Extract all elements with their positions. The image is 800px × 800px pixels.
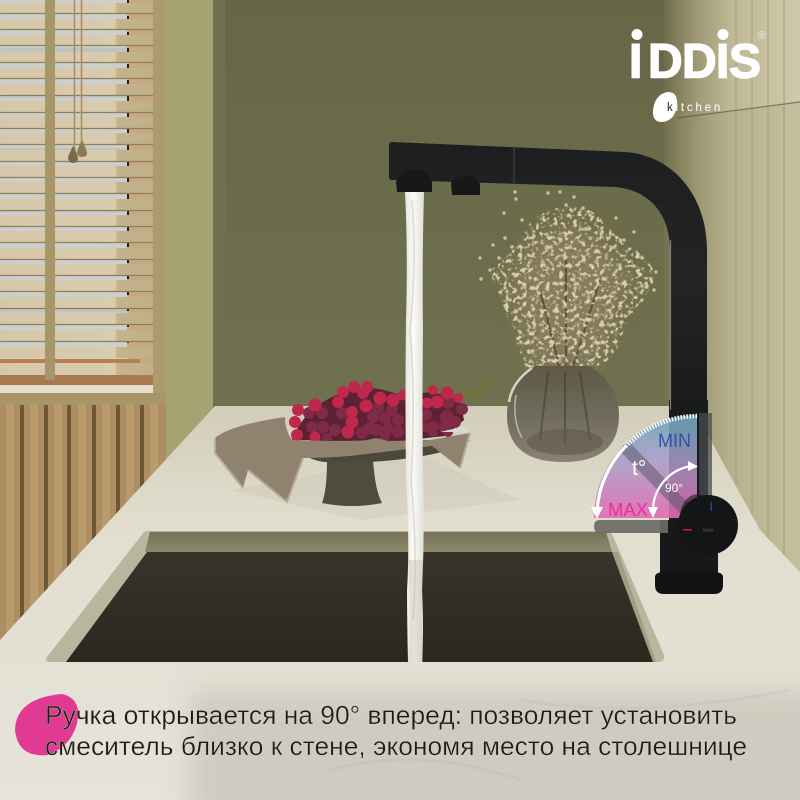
outer dashed arc arrow	[591, 416, 697, 519]
label: MIN: MIN	[658, 431, 691, 452]
label: 90 degrees: 90°	[665, 481, 683, 495]
kitchen badge: kitchen	[667, 102, 723, 114]
panel: wood slat cabinet	[0, 405, 166, 645]
aerator nozzle	[396, 170, 432, 192]
bouquet outer sprigs	[480, 192, 656, 332]
handle position: upright	[699, 413, 712, 500]
bowl	[300, 440, 470, 462]
hot mark	[683, 529, 692, 530]
panel: window with blinds	[0, 0, 166, 405]
filtered water nozzle	[451, 176, 480, 195]
faucet base flange	[655, 572, 723, 594]
pink accent blob	[15, 694, 78, 755]
window frame	[0, 0, 166, 405]
grapes	[289, 381, 468, 443]
faucet	[389, 142, 723, 594]
bouquet stems	[540, 260, 600, 370]
faucet spout	[389, 142, 707, 420]
bowl pedestal	[322, 460, 382, 506]
faucet lower body	[669, 400, 708, 575]
cold mark	[710, 502, 712, 511]
napkin cloth	[215, 417, 470, 502]
handle brand mark: iddis	[703, 528, 714, 534]
vase	[507, 366, 619, 462]
bouquet dense blossoms	[490, 207, 655, 370]
logo: IDDIS kitchen	[629, 29, 766, 122]
faucet handle disc	[675, 491, 738, 555]
caption line 2: смеситель близко к стене, экономя место на столешнице	[45, 731, 747, 761]
label: MAX: MAX	[608, 500, 648, 520]
handle position: forward	[594, 520, 668, 533]
blind pull cords	[68, 0, 87, 163]
diagram: handle 90 degree rotation	[591, 413, 712, 533]
sink basin	[66, 552, 653, 662]
sink	[46, 531, 664, 662]
panel: countertop	[0, 406, 800, 800]
sink rim	[46, 531, 664, 662]
panel: right wall slats	[664, 0, 800, 600]
bouquet base tone	[512, 226, 630, 364]
caption line 1: Ручка открывается на 90° вперед: позволяет установить	[45, 700, 737, 730]
handle position: diagonal	[628, 450, 684, 508]
water stream	[405, 192, 424, 662]
inner 90 degree arrow	[648, 461, 698, 518]
registered mark: ®	[758, 30, 766, 42]
flowers bouquet	[480, 192, 656, 370]
grape stem	[463, 377, 494, 397]
label: temperature: t°	[632, 457, 646, 480]
fruit bowl with grapes	[215, 377, 494, 506]
brand wordmark: IDDIS	[629, 36, 761, 88]
temperature quadrant	[594, 415, 697, 518]
caption text	[45, 700, 747, 761]
